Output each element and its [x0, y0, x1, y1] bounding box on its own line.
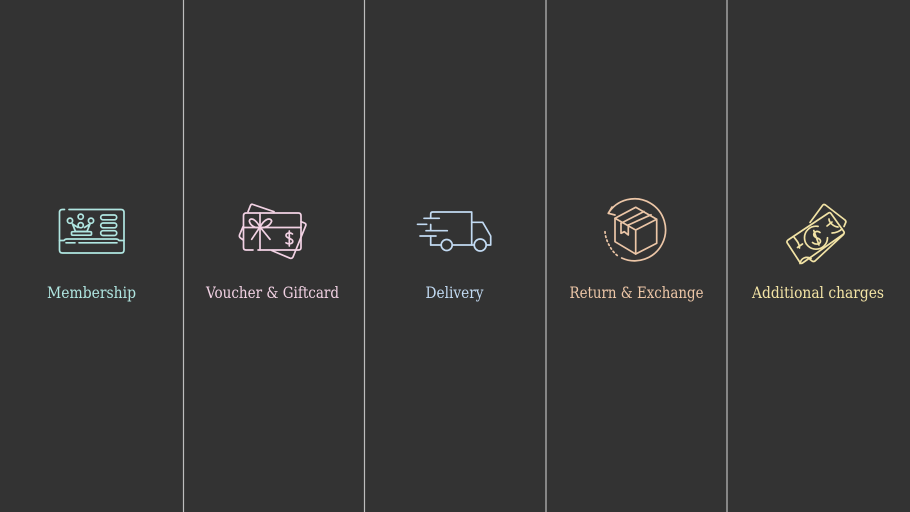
label: voucher and giftcard: Voucher & Giftcard — [205, 284, 339, 302]
icon: banknotes — [787, 205, 846, 264]
panel: return and exchange — [570, 199, 704, 302]
label: membership: Membership — [47, 284, 136, 302]
label: additional charges: Additional charges — [751, 284, 884, 302]
panel: delivery — [418, 212, 491, 302]
label: delivery: Delivery — [426, 284, 484, 302]
icon: gift cards — [239, 204, 306, 258]
panel: additional charges — [751, 205, 884, 302]
icon: membership card with crown — [60, 210, 124, 253]
panel: membership — [47, 210, 136, 302]
icon: returning box — [605, 199, 666, 261]
panel: voucher and giftcard — [205, 204, 339, 302]
label: return and exchange: Return & Exchange — [570, 284, 704, 302]
icon: delivery truck — [418, 212, 491, 251]
